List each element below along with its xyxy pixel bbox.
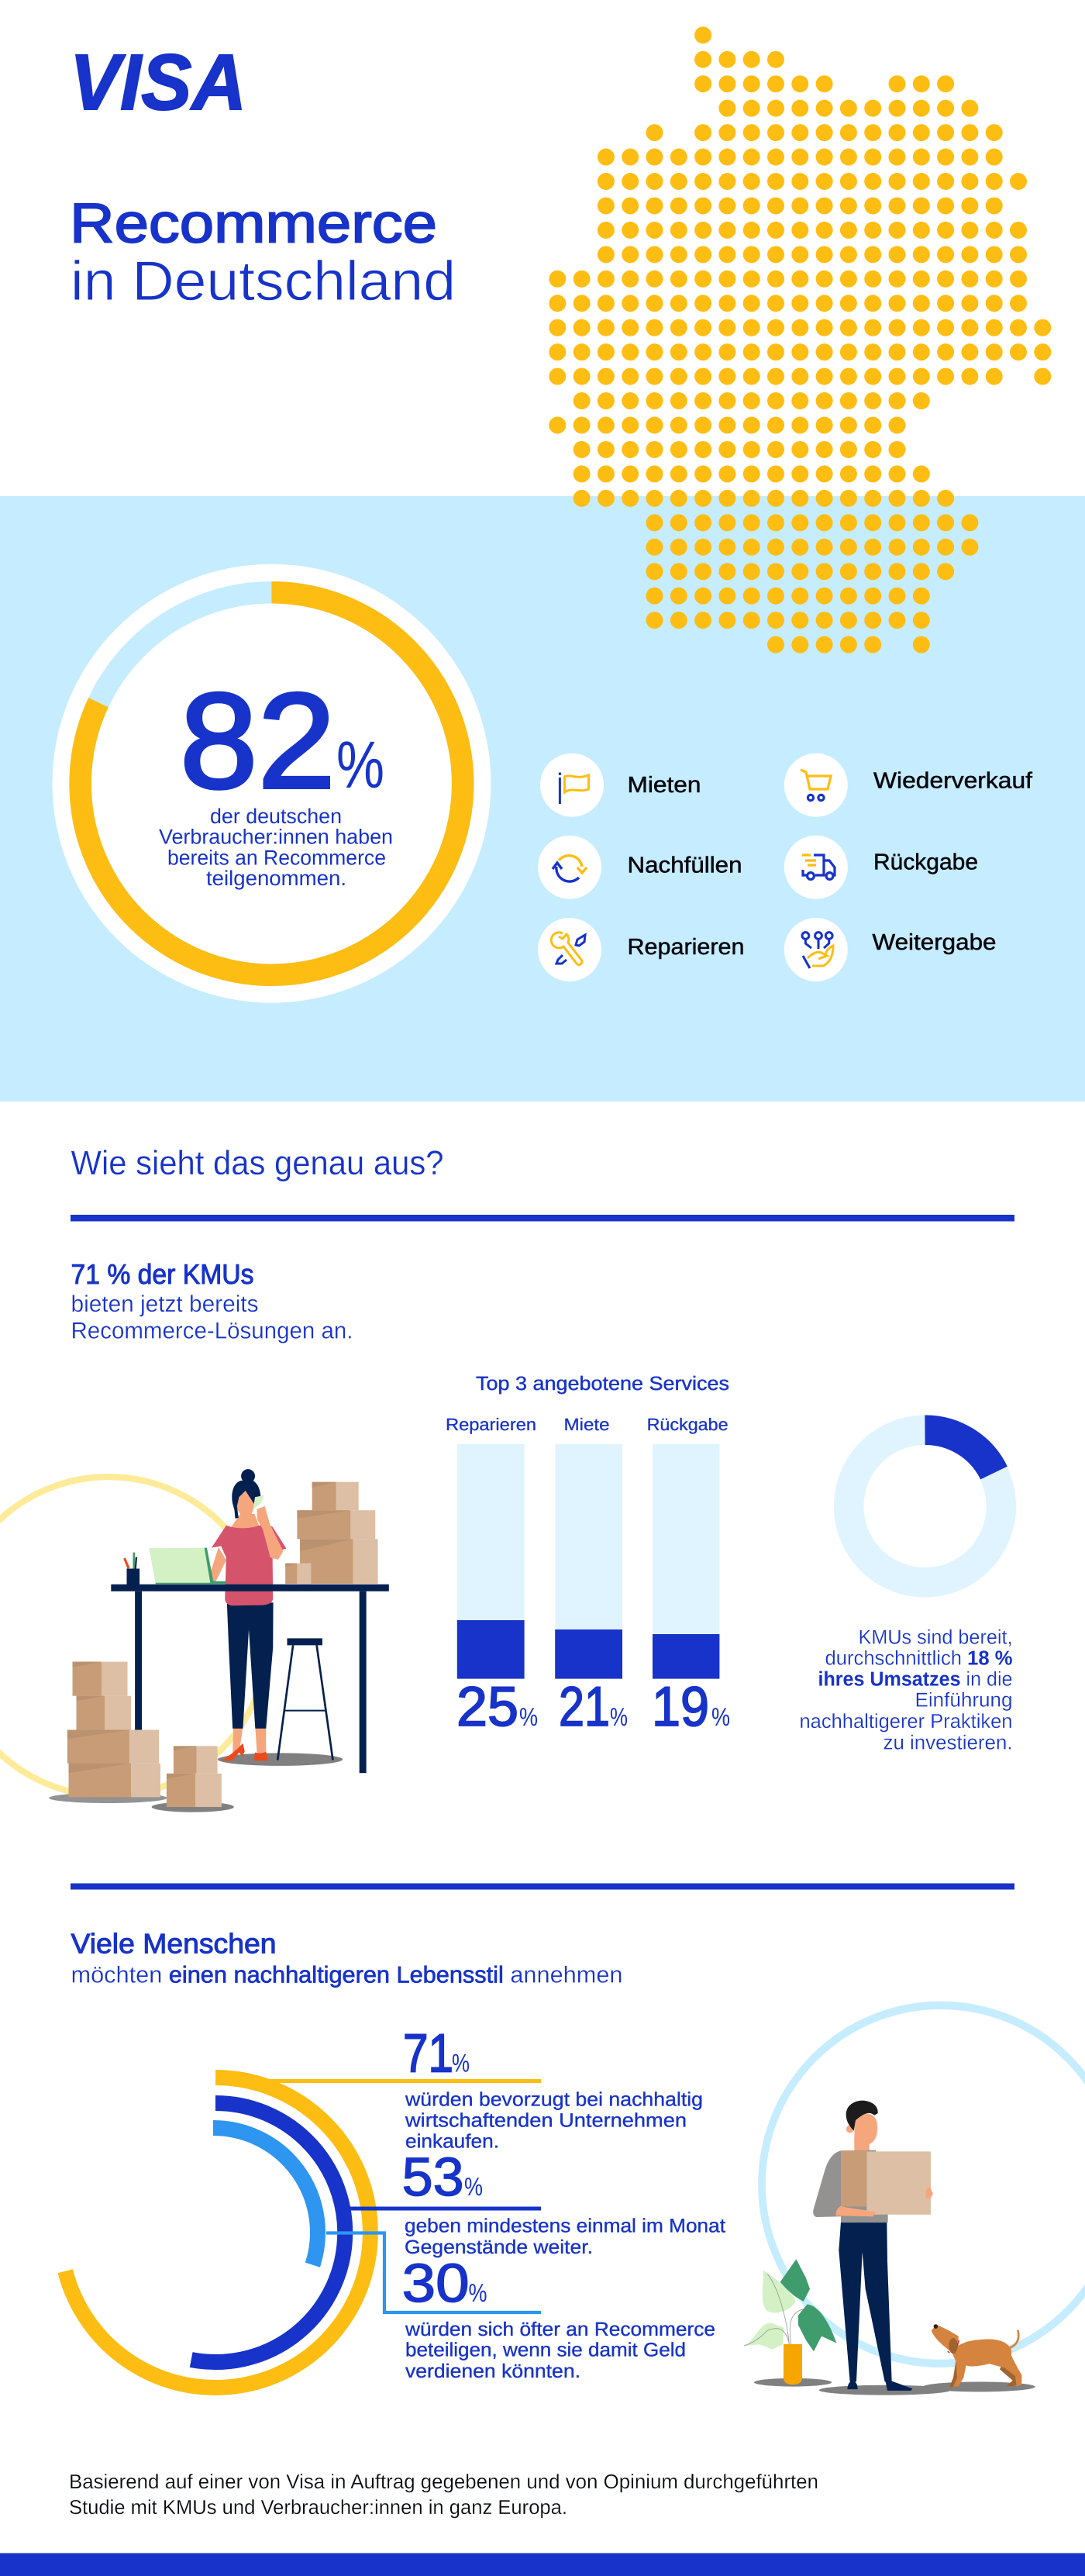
donut caption: teilgenommen. bbox=[206, 867, 346, 890]
bar: Reparieren 25 percent bbox=[446, 1415, 538, 1738]
bar: Rückgabe 19 percent bbox=[647, 1415, 730, 1738]
stat: 71 percent: wirtschaftenden Unternehmen bbox=[405, 2110, 687, 2132]
stat: 30 percent: würden sich öfter an Recommerce bbox=[405, 2319, 715, 2340]
bottom brand bar bbox=[0, 2554, 1085, 2576]
donut caption bbox=[159, 805, 393, 890]
stat: 30 percent bbox=[402, 2253, 715, 2382]
dot map of Germany bbox=[557, 35, 1043, 645]
service list bbox=[538, 753, 1033, 981]
bar: Reparieren 25 percent: 25 bbox=[456, 1676, 518, 1738]
heading: Viele Menschen: möchten einen nachhaltigeren Lebensstil annehmen bbox=[71, 1963, 623, 1988]
text: SMEs willing to invest: KMUs sind bereit, bbox=[859, 1625, 1012, 1648]
stat: 30 percent: % bbox=[468, 2278, 487, 2307]
text: SMEs willing to invest bbox=[800, 1625, 1012, 1754]
block: 71 percent of SMEs: Recommerce-Lösungen an. bbox=[71, 1318, 353, 1344]
illustration: man with box, plant and dog bbox=[744, 2005, 1085, 2395]
donut caption: der deutschen bbox=[210, 805, 342, 828]
donut caption: Verbraucher:innen haben bbox=[159, 825, 393, 848]
donut: 18 percent of revenue bbox=[849, 1430, 1001, 1582]
leader line: 53 percent bbox=[350, 2206, 541, 2211]
label: Reparieren: Reparieren bbox=[628, 935, 744, 960]
bar: Miete 21 percent: Miete bbox=[564, 1415, 609, 1434]
stat: 71 percent: einkaufen. bbox=[405, 2131, 499, 2153]
stat: 30 percent: verdienen könnten. bbox=[405, 2360, 580, 2382]
donut: 82 percent of consumers: % bbox=[336, 728, 384, 802]
laptop bbox=[149, 1548, 226, 1584]
icon: flag bbox=[540, 753, 604, 817]
bar: Miete 21 percent bbox=[555, 1415, 628, 1738]
dog bbox=[932, 2324, 1021, 2388]
bar: Miete 21 percent: 21 bbox=[559, 1676, 610, 1738]
block: 71 percent of SMEs bbox=[71, 1258, 353, 1344]
label: Mieten: Mieten bbox=[628, 773, 701, 798]
boxes on floor bbox=[67, 1662, 222, 1807]
stat: 53 percent: Gegenstände weiter. bbox=[405, 2236, 593, 2258]
label: Weitergabe: Weitergabe bbox=[873, 930, 997, 955]
leader line: 71 percent bbox=[270, 2079, 541, 2083]
bar: Rückgabe 19 percent: % bbox=[711, 1702, 730, 1731]
potted plant bbox=[744, 2259, 836, 2385]
title: Recommerce bbox=[70, 192, 437, 254]
text: SMEs willing to invest: Einführung bbox=[914, 1688, 1012, 1712]
icon: refill arrows bbox=[538, 836, 601, 899]
stat: 53 percent: 53 bbox=[402, 2147, 464, 2207]
text: SMEs willing to invest: ihres Umsatzes in die bbox=[818, 1667, 1012, 1690]
icon: giving hand bbox=[784, 918, 848, 981]
chart heading: Top 3 services: Top 3 angebotene Services bbox=[476, 1373, 729, 1395]
stat: 71 percent bbox=[403, 2023, 703, 2153]
stat: 30 percent: beteiligen, wenn sie damit Geld bbox=[405, 2340, 686, 2361]
label: Rückgabe: Rückgabe bbox=[873, 850, 978, 875]
illustration: woman at desk with parcels bbox=[0, 1469, 389, 1812]
decorative yellow ring bbox=[0, 1477, 268, 1796]
woman bbox=[209, 1469, 286, 1760]
heading: Wie sieht das genau aus?: Wie sieht das genau aus? bbox=[71, 1144, 443, 1182]
stat: 71 percent: 71 bbox=[403, 2023, 453, 2084]
arc: 30 percent bbox=[213, 2128, 318, 2265]
donut: 82 percent of consumers bbox=[53, 564, 491, 1003]
panel: light blue hero background bbox=[0, 496, 1085, 1102]
heading: Viele Menschen: Viele Menschen bbox=[71, 1927, 276, 1960]
heading: Viele Menschen bbox=[71, 1927, 623, 1988]
footnote: Studie mit KMUs und Verbraucher:innen in ganz Europa. bbox=[69, 2495, 567, 2519]
decorative blue ring bbox=[762, 2005, 1085, 2364]
stat: 53 percent: % bbox=[464, 2172, 483, 2201]
bar: Rückgabe 19 percent: Rückgabe bbox=[647, 1415, 728, 1434]
icon: shopping cart bbox=[784, 753, 848, 817]
section rule bbox=[71, 1215, 1014, 1222]
stat: 71 percent: % bbox=[452, 2049, 470, 2078]
floor shadows bbox=[49, 1753, 343, 1812]
Visa logo: VISA bbox=[70, 38, 246, 126]
label: Nachfüllen: Nachfüllen bbox=[628, 853, 742, 878]
title: in Deutschland bbox=[71, 250, 456, 312]
label: Wiederverkauf: Wiederverkauf bbox=[873, 769, 1033, 794]
man bbox=[813, 2101, 933, 2391]
icon: wrench and screwdriver bbox=[538, 918, 601, 981]
radial bar chart bbox=[65, 2078, 541, 2388]
boxes on desk bbox=[285, 1482, 378, 1584]
title bbox=[70, 192, 456, 312]
pen cup bbox=[123, 1553, 140, 1585]
stat: 53 percent: geben mindestens einmal im Monat bbox=[405, 2216, 725, 2237]
donut caption: bereits an Recommerce bbox=[167, 847, 386, 870]
bar: Miete 21 percent: % bbox=[610, 1702, 628, 1731]
block: 71 percent of SMEs: 71 % der KMUs bbox=[71, 1258, 254, 1290]
bar: Rückgabe 19 percent: 19 bbox=[652, 1676, 709, 1738]
leader line: 30 percent bbox=[326, 2233, 541, 2312]
footnote bbox=[69, 2470, 818, 2519]
stat: 71 percent: würden bevorzugt bei nachhaltig bbox=[405, 2089, 703, 2111]
footnote: Basierend auf einer von Visa in Auftrag gegebenen und von Opinium durchgeführten bbox=[69, 2470, 818, 2493]
text: SMEs willing to invest: zu investieren. bbox=[884, 1730, 1012, 1754]
arc: 71 percent bbox=[65, 2078, 370, 2388]
stool bbox=[277, 1638, 333, 1760]
desk bbox=[111, 1585, 389, 1773]
bar: Reparieren 25 percent: Reparieren bbox=[446, 1415, 536, 1434]
bar chart: top 3 services bbox=[446, 1415, 730, 1738]
arc: 53 percent bbox=[191, 2103, 345, 2362]
stat: 53 percent bbox=[402, 2147, 725, 2258]
section rule 2 bbox=[71, 1884, 1014, 1890]
icon: delivery truck bbox=[784, 836, 848, 899]
bar: Reparieren 25 percent: % bbox=[519, 1702, 538, 1731]
donut: 82 percent of consumers: 82 bbox=[180, 666, 336, 817]
stat: 30 percent: 30 bbox=[402, 2253, 470, 2313]
text: SMEs willing to invest: nachhaltigerer Praktiken bbox=[800, 1709, 1012, 1733]
block: 71 percent of SMEs: bieten jetzt bereits bbox=[71, 1291, 259, 1317]
text: SMEs willing to invest: durchschnittlich 18 % bbox=[825, 1647, 1012, 1670]
floor shadows bbox=[754, 2378, 1035, 2395]
